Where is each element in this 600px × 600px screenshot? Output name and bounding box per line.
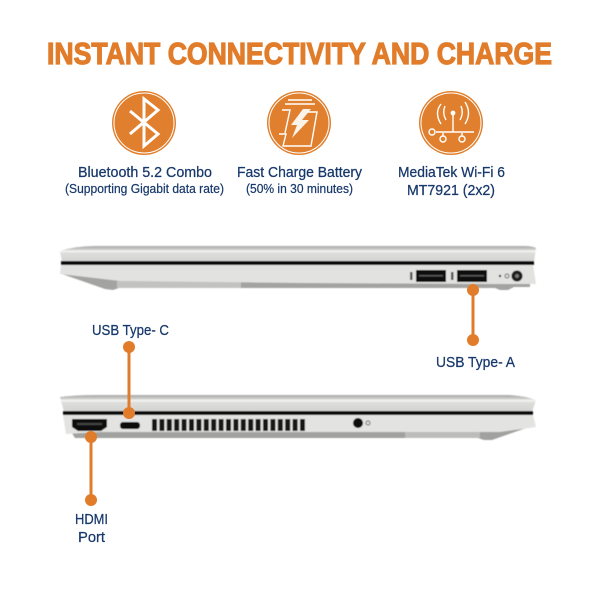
callout: USB Type-C: USB Type- C [92,322,169,339]
power jack [499,270,522,282]
hinge gap [61,261,534,265]
note: Supporting Gigabit data rate: (Supporting Gigabit data rate) [65,182,224,196]
USB-C port [120,422,140,429]
feature: Wi-Fi [398,91,505,199]
lid [60,246,536,262]
base [63,415,536,434]
speaker texture [405,432,480,438]
hinge gap [63,411,533,415]
USB-A ports [410,270,487,282]
icon: wifi [419,91,483,155]
audio jack [353,418,370,428]
lower shell [70,420,532,440]
label: MT7921 (2x2): MT7921 (2x2) [407,182,495,199]
icon: bluetooth [112,91,176,155]
base [60,265,536,284]
HDMI port [72,419,107,431]
lower shell [62,272,530,290]
icon: battery [267,91,331,155]
callout: HDMI Port: Port [78,529,106,546]
feature: Bluetooth [65,91,224,196]
callout: HDMI Port [75,431,108,546]
callout: USB Type-A: USB Type- A [436,354,515,371]
callout: USB Type-A [436,284,515,371]
callout: HDMI Port: HDMI [75,511,108,528]
callout: USB Type-C [92,322,169,419]
label: Bluetooth 5.2 Combo: Bluetooth 5.2 Combo [78,164,212,181]
lid [60,395,536,412]
laptop: left side view [60,395,536,440]
vents [152,419,305,431]
laptop: right side view [60,246,536,290]
note: 50% in 30 minutes: (50% in 30 minutes) [246,182,353,196]
speaker texture [117,281,241,288]
label: Fast Charge Battery: Fast Charge Battery [237,164,362,181]
feature: Fast charge [237,91,362,196]
label: MediaTek Wi-Fi 6: MediaTek Wi-Fi 6 [398,164,505,181]
